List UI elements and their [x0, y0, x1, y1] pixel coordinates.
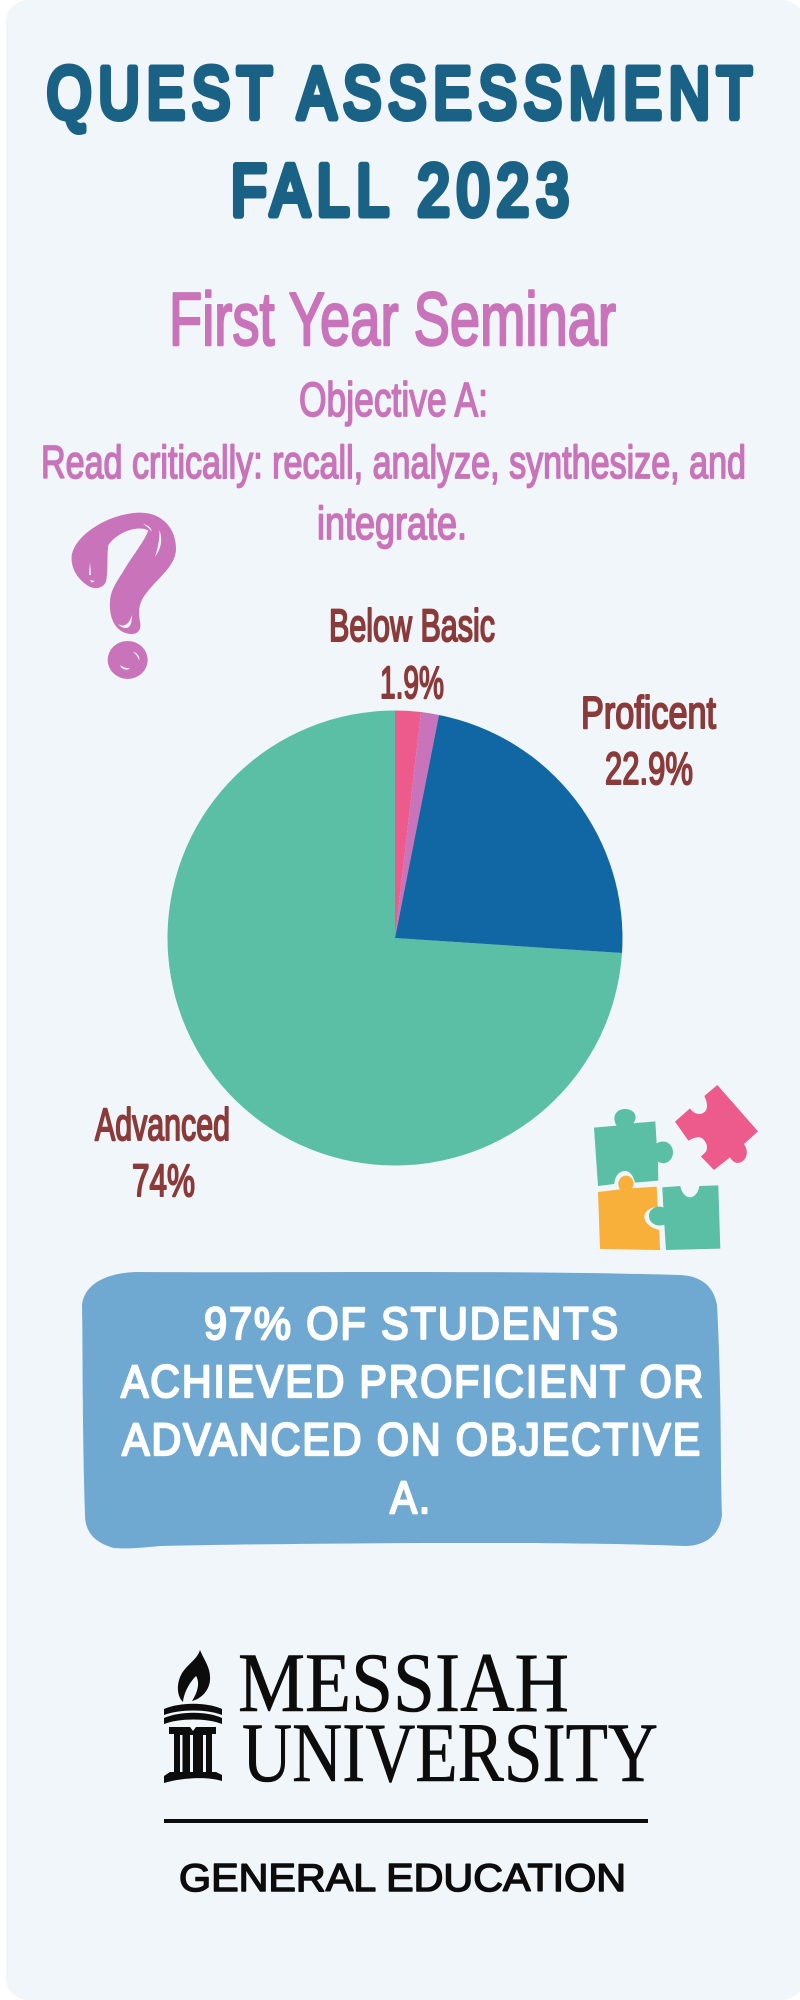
pie chart [167, 710, 622, 1166]
label: proficient: Proficent [581, 687, 716, 738]
label: below basic: 1.9% [380, 657, 444, 708]
objective text: integrate. [317, 497, 467, 549]
callout text: 97% OF STUDENTS [204, 1298, 620, 1349]
objective text: Objective A: [299, 374, 488, 427]
label: advanced: Advanced [95, 1099, 230, 1150]
divider line [164, 1819, 648, 1823]
title [47, 54, 759, 231]
logo wordmark: UNIVERSITY [242, 1706, 658, 1800]
label: below basic: Below Basic [329, 600, 495, 651]
subtitle: first year seminar: First Year Seminar [169, 277, 616, 361]
callout text: ACHIEVED PROFICIENT OR [121, 1356, 705, 1407]
slice: purple sliver [395, 712, 439, 938]
logo: messiah university [164, 1636, 658, 1900]
slice: advanced 74% [167, 710, 622, 1166]
icon: puzzle pieces [594, 1085, 758, 1250]
callout [82, 1272, 722, 1548]
slice: below basic 1.9% [395, 710, 421, 938]
label: proficient [581, 687, 716, 794]
callout text [121, 1298, 705, 1523]
logo wordmark [238, 1636, 658, 1800]
title: FALL 2023 [231, 151, 576, 231]
label: advanced: 74% [132, 1155, 195, 1206]
label: proficient: 22.9% [605, 743, 693, 794]
general education: GENERAL EDUCATION [179, 1857, 626, 1900]
callout text: A. [390, 1472, 432, 1523]
label: advanced [95, 1099, 230, 1206]
slice: proficient 22.9% [395, 715, 622, 953]
icon: torch [164, 1650, 222, 1783]
objective text [41, 374, 746, 549]
icon: question mark [72, 513, 176, 679]
callout text: ADVANCED ON OBJECTIVE [122, 1414, 702, 1465]
callout box [82, 1272, 722, 1548]
label: below basic [329, 600, 495, 708]
logo wordmark: MESSIAH [238, 1636, 569, 1730]
